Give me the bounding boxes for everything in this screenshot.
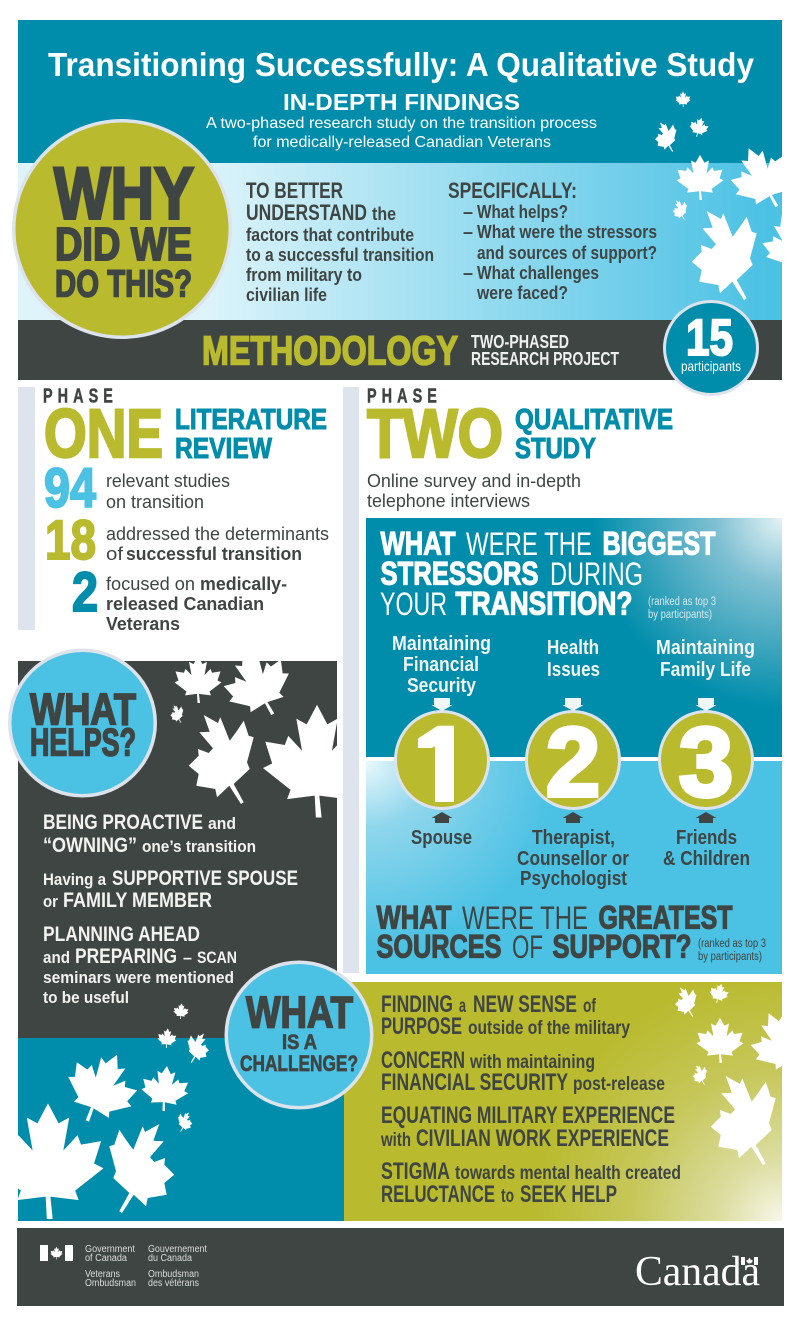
note: ranked top 3: by participants): [648, 609, 712, 621]
heading: two: TWO: [367, 395, 503, 472]
text: government of canada: Veterans: [85, 1269, 120, 1280]
heading: methodology: METHODOLOGY: [202, 328, 458, 374]
stressor 3 label: Family Life: [660, 659, 751, 681]
text: stigma: [381, 1158, 681, 1208]
text: supportive spouse: SUPPORTIVE SPOUSE: [112, 867, 298, 890]
heading: literature review: [175, 404, 327, 465]
text: planning ahead: and: [43, 948, 70, 967]
stressor 1 label: Financial: [403, 654, 479, 676]
text: planning ahead: PREPARING: [75, 945, 177, 968]
heading: greatest sources of support: SUPPORT?: [552, 928, 692, 964]
text: specifically: were faced?: [476, 283, 568, 303]
description text: A two-phased research study on the transition process: [206, 115, 597, 132]
callout: 15 participants: participants: [681, 358, 741, 374]
heading: greatest sources of support: [376, 900, 733, 965]
text: finding new sense: a: [459, 996, 466, 1017]
heading: greatest sources of support: GREATEST: [598, 900, 733, 936]
text: specifically: What helps?: [477, 202, 568, 222]
stat: 2 focused on veterans: Veterans: [106, 614, 180, 634]
stat: 94 relevant studies: [44, 456, 230, 519]
stressor 1 label: Security: [407, 675, 477, 697]
rank circle 3: [658, 698, 754, 823]
callout: what is a challenge circle: CHALLENGE?: [240, 1051, 358, 1076]
text: finding new sense: [381, 991, 630, 1040]
title: Transitioning Successfully: A Qualitative Study: [48, 46, 755, 83]
text: online survey: [367, 471, 581, 511]
text: supportive spouse: FAMILY MEMBER: [63, 889, 212, 912]
text: planning ahead: [43, 923, 237, 1007]
text: two-phased research project: RESEARCH PROJECT: [471, 349, 619, 369]
description text: for medically-released Canadian Veterans: [253, 134, 551, 151]
text: supportive spouse: [43, 867, 298, 912]
support 3 label: [663, 827, 750, 870]
text: specifically: What challenges: [477, 263, 599, 283]
text: government of canada: Ombudsman: [148, 1269, 199, 1280]
text: supportive spouse: or: [43, 892, 58, 911]
panel: footer: [17, 1228, 784, 1306]
support 1 label: Spouse: [411, 827, 472, 849]
text: stigma: RELUCTANCE: [381, 1181, 495, 1208]
icons: maple leaves in olive panel: [675, 984, 782, 1165]
text: finding new sense: FINDING: [381, 991, 453, 1018]
text: planning ahead: seminars were mentioned: [43, 968, 234, 987]
icons: small leaves crossing panels: [157, 1003, 209, 1063]
text: specifically: and sources of support?: [477, 243, 657, 263]
text: to better understand: UNDERSTAND: [246, 200, 367, 225]
panel: what helps: [18, 661, 337, 1038]
text: government of canada: Ombudsman: [85, 1278, 136, 1289]
note: ranked top 3: by participants): [698, 951, 762, 963]
stressor 2 label: Health: [547, 637, 599, 659]
text: planning ahead: SCAN: [197, 948, 237, 967]
panel: biggest stressors: [366, 518, 782, 757]
icon: government flag: [40, 1245, 73, 1261]
heading: greatest sources of support: OF: [512, 929, 543, 965]
stat: 2 focused on veterans: medically-: [200, 574, 287, 594]
text: to better understand: from military to: [246, 265, 362, 285]
callout: why did we do this circle: [12, 119, 232, 339]
heading: greatest sources of support: WERE THE: [462, 900, 588, 936]
text: specifically: –: [463, 202, 473, 222]
callout: what is a challenge circle: WHAT: [246, 988, 353, 1038]
panel: methodology band: [18, 320, 782, 380]
text: specifically: [448, 178, 657, 303]
text: government of canada: du Canada: [148, 1253, 192, 1264]
text: stigma: STIGMA: [381, 1158, 450, 1185]
callout: why did we do this circle: DID WE: [55, 218, 192, 270]
text: finding new sense: outside of the military: [468, 1018, 630, 1039]
text: to better understand: [246, 178, 434, 305]
text: specifically: –: [463, 222, 473, 242]
text: planning ahead: to be useful: [43, 988, 129, 1007]
text: equating military experience: with: [380, 1130, 411, 1151]
heading: biggest stressors: TRANSITION?: [456, 586, 632, 622]
heading: biggest stressors: WERE THE: [466, 526, 592, 562]
heading: literature review: REVIEW: [175, 433, 273, 465]
text: government of canada: of Canada: [85, 1253, 127, 1264]
stressor 1 label: Maintaining: [392, 633, 491, 655]
text: government of canada: Gouvernement: [148, 1244, 207, 1255]
heading: biggest stressors: WHAT: [380, 526, 456, 562]
text: to better understand: the: [372, 204, 396, 224]
panel: what is a challenge: [344, 981, 800, 1221]
support 2 label: Psychologist: [520, 868, 627, 890]
note: ranked top 3: [648, 596, 716, 621]
panel: why did we do this: [18, 163, 782, 320]
text: specifically: What were the stressors: [477, 222, 657, 242]
logo: canada wordmark: Canada: [635, 1249, 760, 1295]
stressor 3 label: [656, 637, 755, 681]
rank circle 2: [525, 698, 621, 823]
callout: what helps circle: [8, 648, 157, 798]
stressor 2 label: [547, 637, 600, 681]
callout: what helps circle: HELPS?: [30, 722, 136, 764]
subtitle: in-depth findings: IN-DEPTH FINDINGS: [283, 89, 520, 115]
stat: 94 relevant studies: on transition: [106, 492, 204, 512]
rank circle 1: 1: [414, 707, 471, 821]
heading: biggest stressors: YOUR: [380, 586, 447, 622]
heading: greatest sources of support: SOURCES: [376, 928, 502, 964]
note: ranked top 3: (ranked as top 3: [698, 938, 766, 950]
stat: 18 addressed determinants: of: [106, 544, 124, 564]
support 2 label: [517, 827, 629, 890]
heading: biggest stressors: BIGGEST: [602, 526, 716, 562]
stat: 2 focused on veterans: released Canadian: [106, 594, 264, 614]
text: specifically: –: [463, 263, 473, 283]
stat: 18 addressed determinants: [45, 508, 329, 571]
text: equating military experience: [380, 1102, 675, 1152]
text: being proactive: BEING PROACTIVE: [43, 811, 203, 834]
note: ranked top 3: (ranked as top 3: [648, 596, 716, 608]
heading: biggest stressors: [380, 526, 716, 622]
text: planning ahead: –: [183, 948, 192, 967]
description text: [206, 115, 597, 151]
text: concern with financial security: post-release: [573, 1074, 665, 1095]
text: online survey: telephone interviews: [367, 491, 530, 511]
text: two-phased research project: [471, 332, 619, 369]
text: being proactive: and: [208, 814, 236, 833]
stat: 18 addressed determinants: addressed the determinants: [106, 524, 329, 544]
callout: what is a challenge circle: [224, 960, 374, 1110]
heading: biggest stressors: STRESSORS: [380, 556, 538, 592]
callout: what helps circle: WHAT: [30, 686, 136, 734]
heading: biggest stressors: DURING: [550, 556, 643, 592]
panel: sources of support: [366, 761, 782, 974]
text: finding new sense: of: [583, 996, 596, 1017]
callout: why did we do this circle: WHY: [54, 154, 194, 234]
heading: one: ONE: [44, 395, 163, 472]
text: stigma: towards mental health created: [455, 1163, 681, 1184]
text: two-phased research project: TWO-PHASED: [471, 332, 569, 352]
heading: qualitative study: QUALITATIVE: [515, 404, 673, 436]
support 3 label: Friends: [676, 827, 737, 849]
support 2 label: Counsellor or: [517, 848, 629, 870]
text: planning ahead: PLANNING AHEAD: [43, 923, 200, 946]
panel: teal leaves: [0, 1038, 344, 1221]
stressor 1 label: [392, 633, 491, 697]
text: supportive spouse: Having a: [43, 870, 106, 889]
text: to better understand: civilian life: [246, 285, 327, 305]
icons: maple leaves in teal panel: [18, 1054, 192, 1219]
stat: 18 addressed determinants: 18: [45, 508, 96, 571]
rank circle 3: 3: [679, 707, 733, 817]
rank circle 2: 2: [546, 707, 600, 817]
text: government of canada: [85, 1244, 207, 1289]
text: stigma: to: [501, 1186, 514, 1207]
text: concern with financial security: CONCERN: [381, 1047, 465, 1074]
rank circle 1: [394, 698, 490, 823]
text: to better understand: factors that contribute: [246, 225, 414, 245]
text: being proactive: [43, 811, 256, 857]
stat: 2 focused on veterans: focused on: [106, 574, 195, 594]
text: online survey: Online survey and in-depth: [367, 471, 581, 491]
stat: 2 focused on veterans: [72, 560, 287, 634]
text: to better understand: TO BETTER: [246, 178, 343, 203]
text: concern with financial security: with maintaining: [469, 1052, 595, 1073]
icons: maple leaves in what helps: [170, 661, 337, 818]
label: phase: PHASE: [367, 384, 437, 407]
panel: phase two: [343, 384, 673, 973]
text: finding new sense: NEW SENSE: [473, 991, 577, 1018]
label: phase: PHASE: [43, 384, 113, 407]
text: equating military experience: EQUATING MILITARY EXPERIENCE: [381, 1102, 675, 1129]
text: concern with financial security: [381, 1047, 665, 1096]
note: ranked top 3: [698, 938, 766, 963]
stressor 2 label: Issues: [547, 659, 600, 681]
text: being proactive: “OWNING”: [43, 834, 137, 857]
text: equating military experience: CIVILIAN WORK EXPERIENCE: [416, 1125, 669, 1152]
support 2 label: Therapist,: [532, 827, 615, 849]
text: government of canada: Government: [85, 1244, 135, 1255]
text: government of canada: des vétérans: [148, 1278, 199, 1289]
heading: qualitative study: STUDY: [515, 433, 596, 465]
panel: header band: [18, 20, 782, 163]
heading: qualitative study: [515, 404, 673, 465]
panel: phase one: [18, 384, 329, 634]
stat: 2 focused on veterans: 2: [72, 560, 98, 623]
heading: literature review: LITERATURE: [175, 404, 327, 436]
text: to better understand: to a successful transition: [246, 245, 434, 265]
callout: what is a challenge circle: IS A: [282, 1031, 317, 1054]
text: stigma: SEEK HELP: [520, 1181, 617, 1208]
text: finding new sense: PURPOSE: [381, 1013, 462, 1040]
callout: 15 participants: [663, 300, 759, 396]
icons: maple leaves top right: [655, 92, 782, 300]
text: being proactive: one’s transition: [142, 837, 256, 856]
stat: 94 relevant studies: 94: [44, 456, 96, 519]
support 3 label: & Children: [663, 848, 750, 870]
stat: 94 relevant studies: relevant studies: [106, 471, 230, 491]
text: concern with financial security: FINANCIAL SECURITY: [381, 1069, 568, 1096]
heading: greatest sources of support: WHAT: [376, 900, 452, 936]
callout: 15 participants: 15: [686, 309, 733, 366]
stressor 3 label: Maintaining: [656, 637, 755, 659]
stat: 18 addressed determinants: successful transition: [126, 544, 302, 564]
callout: why did we do this circle: DO THIS?: [55, 264, 192, 306]
text: specifically: SPECIFICALLY:: [448, 178, 577, 203]
